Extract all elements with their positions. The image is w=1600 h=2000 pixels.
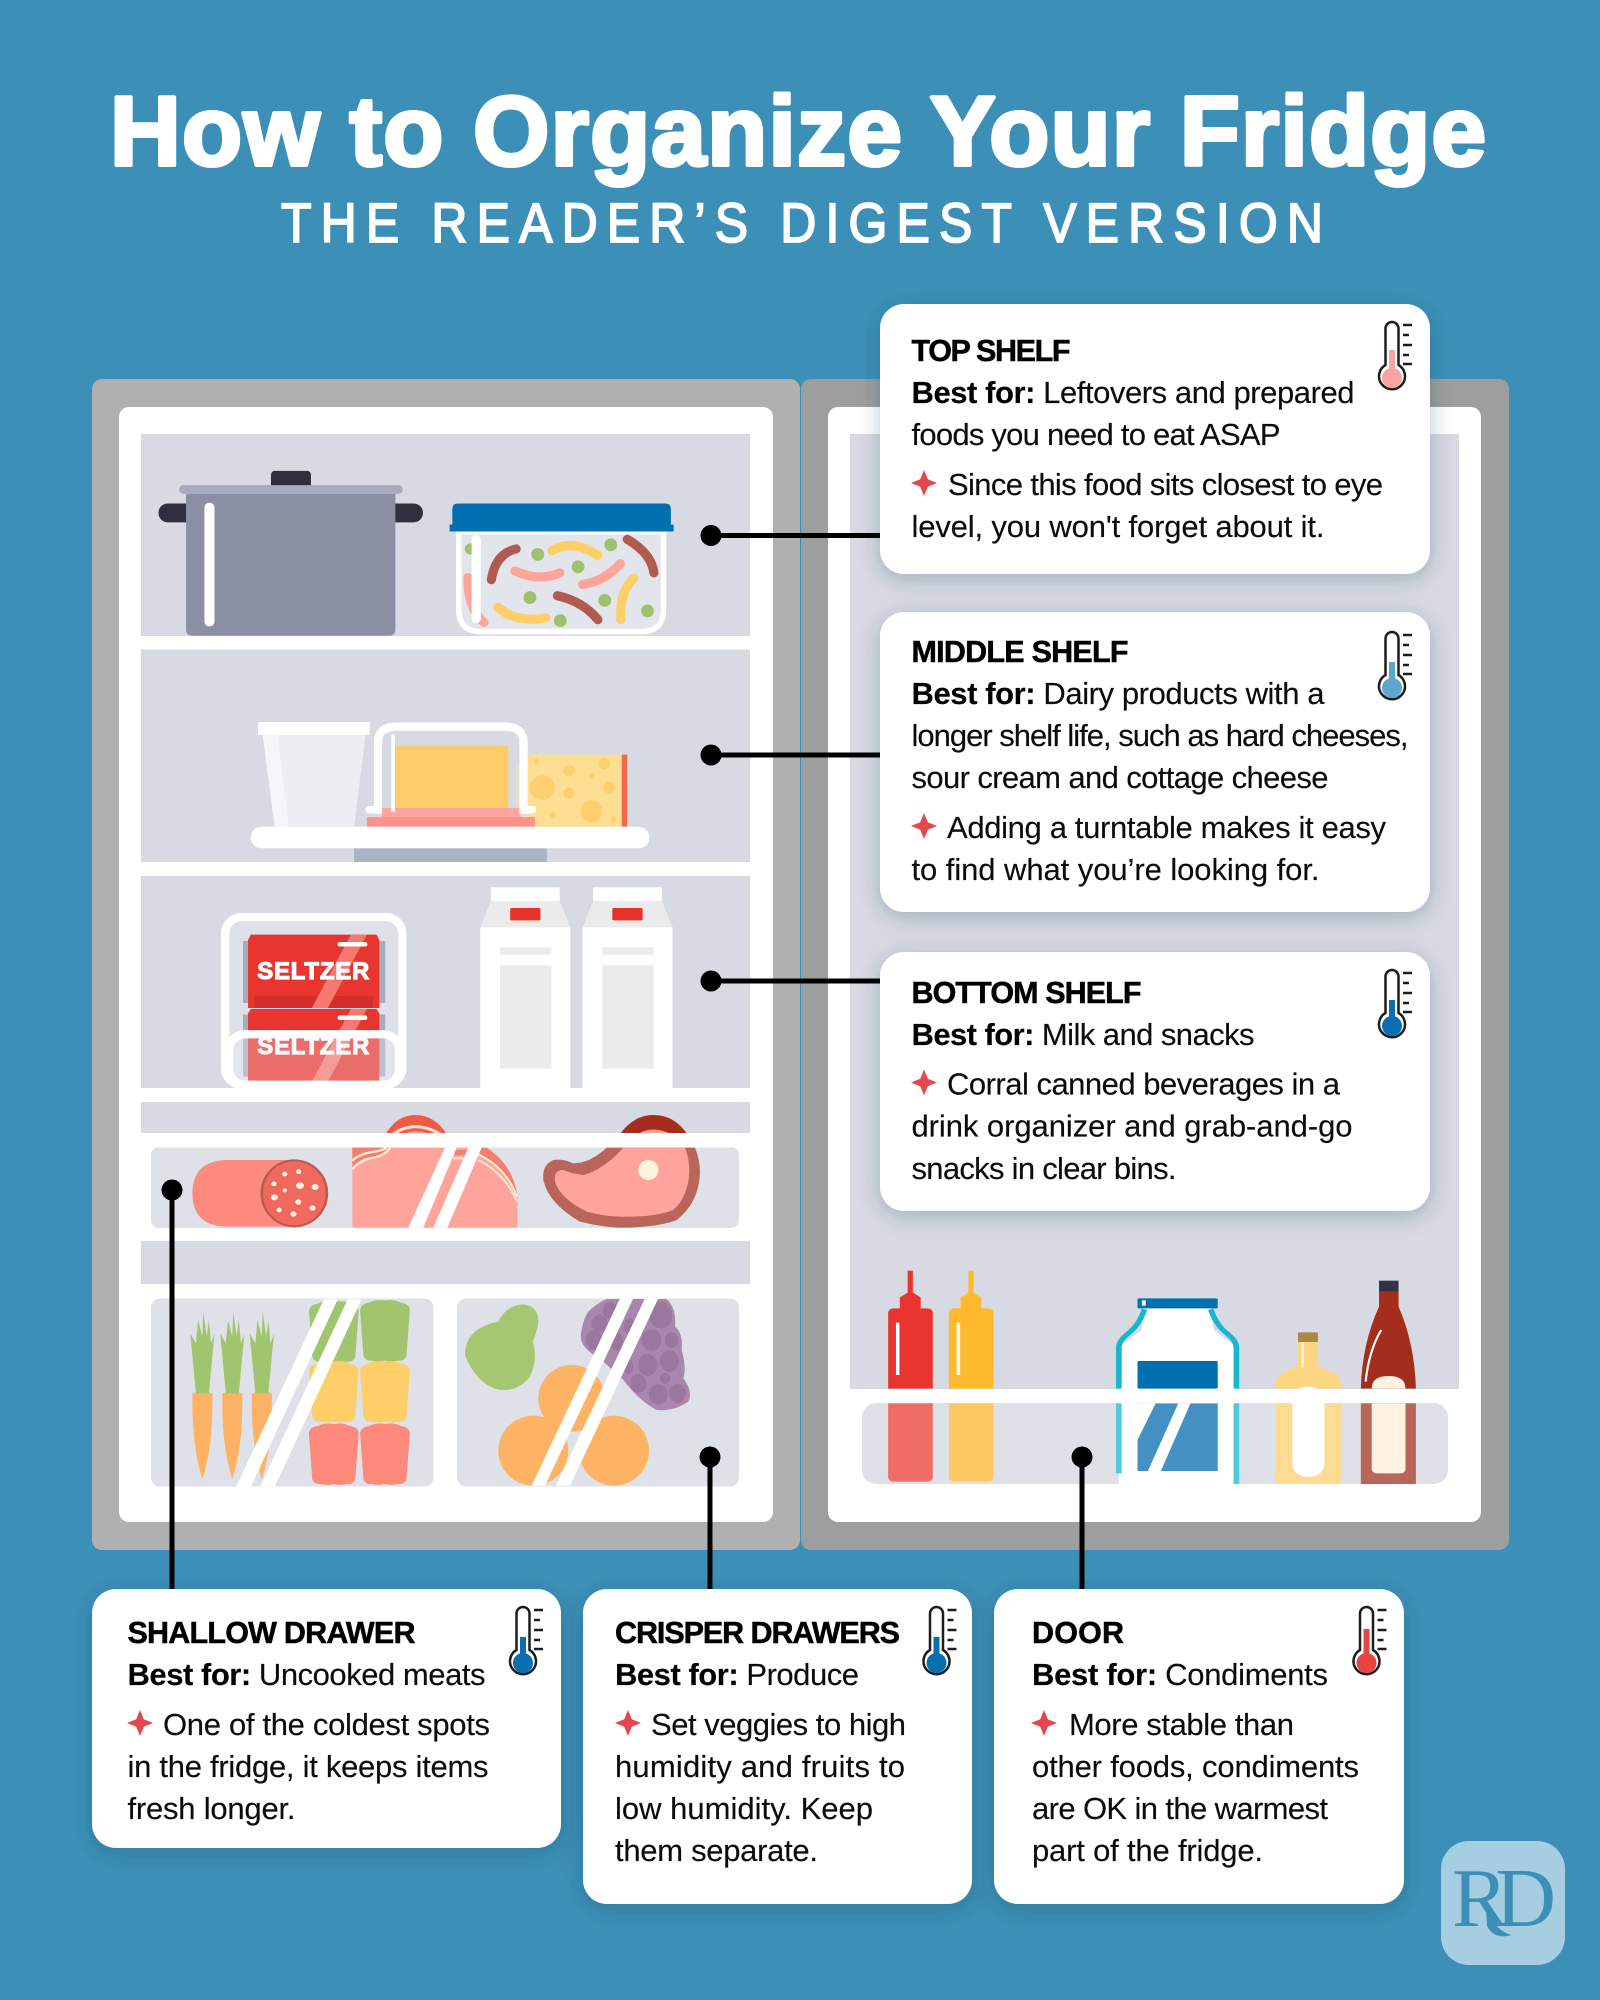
middle shelf items <box>251 722 649 862</box>
icon: leftovers container <box>450 503 674 632</box>
can: seltzer top: SELTZER <box>257 958 369 985</box>
callout: crisper drawers <box>583 1589 972 1904</box>
bottom shelf items <box>225 887 672 1088</box>
icon: star bullet <box>1031 1710 1057 1736</box>
panel: fridge interior (left) <box>92 379 800 1550</box>
callout: middle shelf: sour cream and cottage cheese <box>912 760 1328 795</box>
best for: Best for: Uncooked meats <box>128 1657 486 1692</box>
callout: door: are OK in the warmest <box>1032 1791 1328 1826</box>
callout: door <box>994 1589 1404 1904</box>
icon: jar <box>1119 1298 1236 1484</box>
icon: oil bottle <box>1275 1332 1342 1484</box>
icon: star bullet <box>127 1710 153 1736</box>
icon: mustard bottle <box>949 1271 994 1482</box>
logo: RD <box>1441 1841 1565 1965</box>
icon: ketchup bottle <box>888 1271 933 1482</box>
logo: RD: RD <box>1452 1852 1556 1945</box>
best for: Best for: Leftovers and prepared <box>912 375 1354 410</box>
can: seltzer top <box>248 935 379 1008</box>
best for: Best for: Dairy products with a <box>912 676 1325 711</box>
callout: top shelf: foods you need to eat ASAP <box>912 417 1280 452</box>
connector: door <box>1072 1446 1092 1595</box>
connector: shallow drawer <box>162 1180 182 1595</box>
best for: Best for: Condiments <box>1032 1657 1328 1692</box>
callout: shallow drawer <box>92 1589 561 1848</box>
icon: pear <box>465 1304 538 1390</box>
tip: More stable than <box>1069 1707 1294 1742</box>
icon: turntable <box>251 827 649 862</box>
callout: door: other foods, condiments <box>1032 1749 1359 1784</box>
callout: shallow drawer: fresh longer. <box>128 1791 296 1826</box>
can: seltzer bottom <box>248 1009 379 1082</box>
callout: middle shelf <box>880 612 1430 912</box>
icon: thermometer light blue <box>1379 632 1412 699</box>
tip: Since this food sits closest to eye <box>948 467 1383 502</box>
icon: peppers <box>309 1300 410 1485</box>
callout: crisper drawers: humidity and fruits to <box>615 1749 905 1784</box>
subtitle: THE READER’S DIGEST VERSION <box>281 192 1323 255</box>
tip: Set veggies to high <box>651 1707 906 1742</box>
icon: steak <box>543 1115 700 1228</box>
icon: milk carton 2 <box>582 887 672 1088</box>
icon: seltzer bin <box>225 917 402 1085</box>
icon: carrots <box>190 1312 274 1479</box>
panel: fridge door (right) <box>801 379 1509 1550</box>
best for: Best for: Milk and snacks <box>912 1017 1254 1052</box>
icon: thermometer dark blue <box>1379 970 1412 1037</box>
tip: Adding a turntable makes it easy <box>947 810 1386 845</box>
icon: thermometer blue <box>924 1607 956 1674</box>
title: How to Organize Your Fridge <box>110 76 1486 186</box>
tip: One of the coldest spots <box>163 1707 490 1742</box>
callout: top shelf <box>880 304 1430 574</box>
icon: thermometer pink <box>1379 322 1412 389</box>
heading: CRISPER DRAWERS <box>615 1616 900 1650</box>
connector: middle shelf <box>700 744 886 766</box>
icon: butter dish <box>366 727 536 827</box>
icon: thermometer red <box>1354 1607 1386 1674</box>
best for: Best for: Produce <box>615 1657 859 1692</box>
callout: middle shelf: to find what you’re looking for. <box>912 852 1320 887</box>
callout: crisper drawers: low humidity. Keep <box>615 1791 873 1826</box>
tip: Corral canned beverages in a <box>947 1066 1341 1102</box>
can: seltzer bottom: SELTZER <box>257 1033 369 1060</box>
heading: BOTTOM SHELF <box>912 976 1142 1010</box>
icon: pot <box>159 471 423 636</box>
crisper: fruit <box>465 1298 690 1486</box>
icon: cheese wedge <box>515 755 627 827</box>
icon: milk carton 1 <box>480 887 570 1088</box>
callout: shallow drawer: in the fridge, it keeps items <box>128 1749 488 1784</box>
icon: grapes <box>581 1299 690 1410</box>
heading: TOP SHELF <box>912 334 1070 368</box>
heading: MIDDLE SHELF <box>912 635 1128 669</box>
crisper: vegetables <box>190 1299 410 1487</box>
callout: top shelf: level, you won't forget about it. <box>912 509 1324 544</box>
heading: SHALLOW DRAWER <box>128 1616 416 1650</box>
connector: crisper drawers <box>700 1446 720 1595</box>
callout: bottom shelf: drink organizer and grab-and-go <box>912 1108 1352 1144</box>
heading: DOOR <box>1032 1616 1124 1650</box>
icon: sour cream tub <box>258 722 370 827</box>
connector: top shelf <box>700 525 886 546</box>
callout: bottom shelf: snacks in clear bins. <box>912 1151 1176 1186</box>
icon: star bullet <box>911 470 937 496</box>
door condiments <box>888 1271 1416 1484</box>
icon: wine bottle <box>1361 1281 1416 1484</box>
icon: star bullet <box>911 813 937 839</box>
connector: bottom shelf <box>700 970 886 992</box>
icon: ham <box>352 1115 518 1228</box>
band: shallow drawer lip <box>141 1133 750 1148</box>
callout: middle shelf: longer shelf life, such as hard cheeses, <box>912 718 1408 753</box>
top shelf items <box>159 471 674 636</box>
callout: door: part of the fridge. <box>1032 1833 1263 1868</box>
icon: oranges <box>498 1365 649 1486</box>
icon: star bullet <box>911 1070 937 1096</box>
icon: thermometer blue <box>510 1607 543 1674</box>
callout: crisper drawers: them separate. <box>615 1833 818 1868</box>
callout: bottom shelf <box>880 952 1430 1211</box>
shallow drawer: meats <box>352 1115 700 1228</box>
icon: star bullet <box>615 1710 641 1736</box>
shallow drawer: salami <box>192 1160 327 1227</box>
